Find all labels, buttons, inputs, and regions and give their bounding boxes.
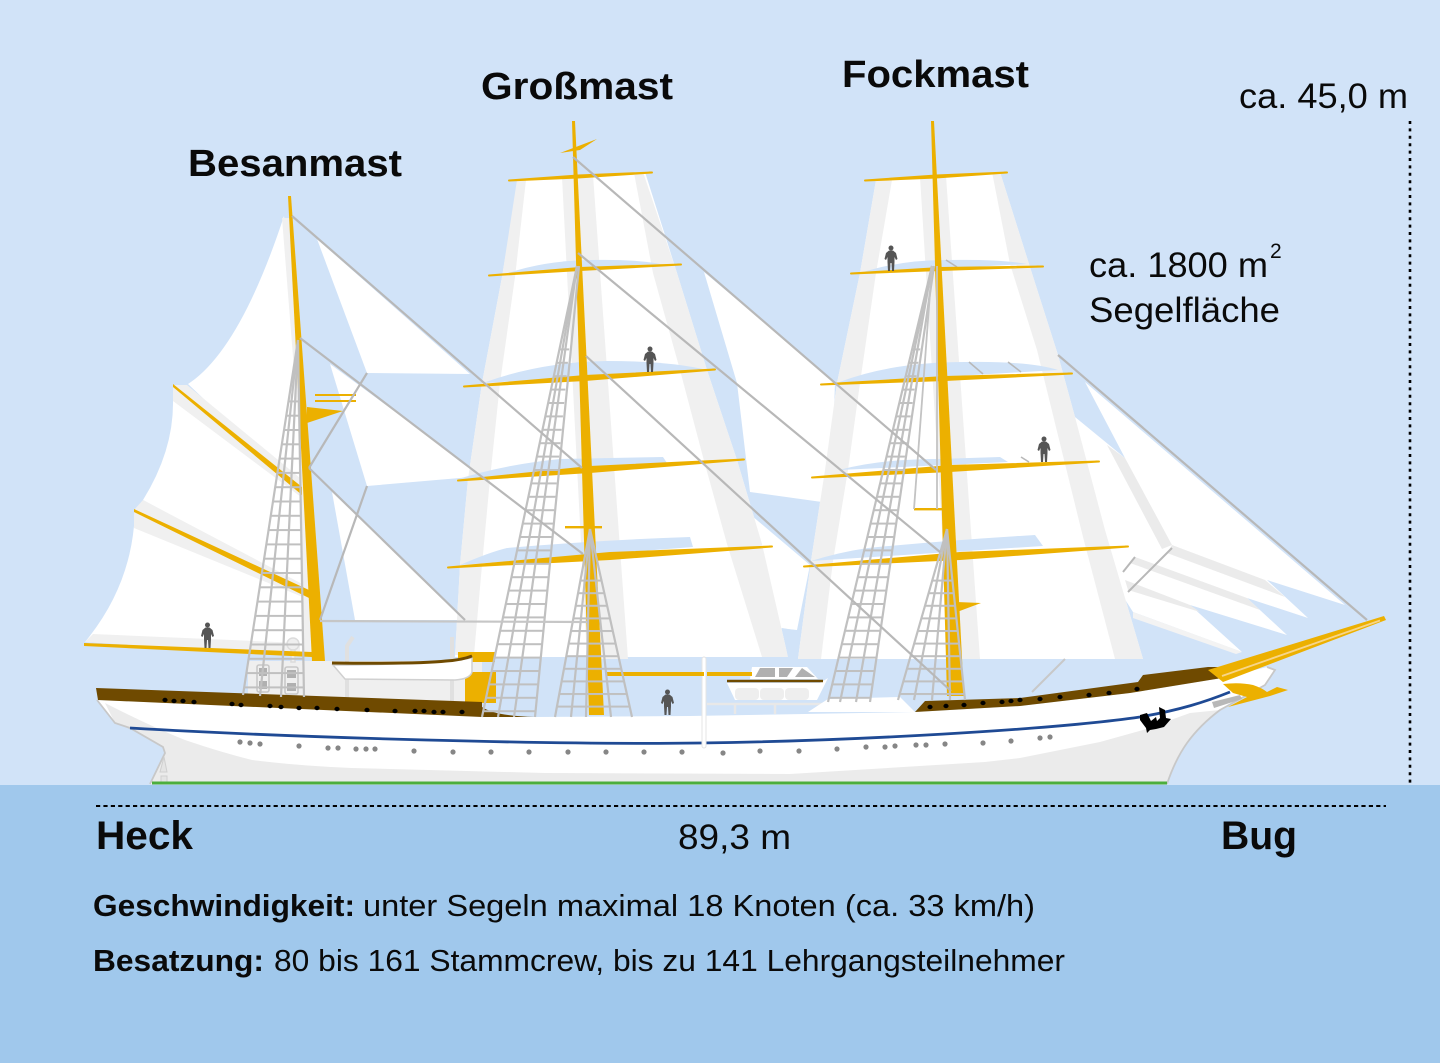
jib sails at the bow <box>1075 382 1345 654</box>
rudder <box>160 757 167 784</box>
height dimension line <box>1409 121 1411 785</box>
crew figures <box>201 246 1050 715</box>
fore mast square sails <box>798 172 1143 659</box>
person on lower fore yard <box>1038 436 1050 462</box>
orange deck blocks <box>458 652 496 703</box>
text: crew: 80 bis 161 Stammcrew, bis zu 141 Lehrgangsteilnehmer <box>274 943 1065 978</box>
sail shading bands <box>798 172 1143 659</box>
sails of the fore mast <box>798 172 1143 659</box>
mast spar <box>572 121 604 715</box>
text: crew: Besatzung: <box>93 943 264 978</box>
sail shading bands <box>85 218 312 656</box>
sky background <box>0 0 1440 786</box>
white hull body <box>97 667 1275 784</box>
person on mizzen boom <box>201 622 214 648</box>
person on upper fore yard <box>884 246 898 271</box>
lower spanker sail <box>85 526 312 656</box>
hull <box>96 657 1275 784</box>
water panel <box>0 785 1440 1063</box>
tender boat with cabin <box>727 667 828 700</box>
fore mast spars <box>804 121 1128 696</box>
mizzen mast shrouds <box>243 340 304 697</box>
heading: Großmast: Großmast <box>481 66 673 108</box>
length dimension line <box>96 805 1386 807</box>
mizzen mast <box>84 196 356 661</box>
hull outlines <box>97 667 1275 784</box>
fore mast forward shrouds <box>828 266 937 702</box>
staysails of the mizzen mast <box>317 239 483 620</box>
label: Heck: Heck <box>96 814 194 858</box>
label: sail area: ca. 1800 m <box>1089 246 1268 285</box>
anchor <box>1140 707 1171 733</box>
lifeboat <box>332 656 472 680</box>
text: speed <box>93 888 1035 923</box>
equipment boxes <box>257 665 298 694</box>
davits <box>347 637 452 702</box>
main to fore stays <box>573 157 936 470</box>
blue hull stripe <box>130 692 1230 743</box>
label: sail area: 2 <box>1270 240 1282 263</box>
radar dome <box>287 638 299 662</box>
staysails between main and fore mast <box>704 272 835 630</box>
label: sail area <box>1089 240 1282 330</box>
main mast square sails <box>455 172 788 657</box>
heading: Fockmast: Fockmast <box>842 54 1029 96</box>
sky showing between fore mast sails <box>811 260 1058 561</box>
mizzen boom line <box>320 621 587 622</box>
person on main yard <box>644 346 656 372</box>
bow ornament <box>1208 616 1386 708</box>
mast cross tree <box>560 139 597 153</box>
heading: Besanmast: Besanmast <box>188 143 402 185</box>
mizzen gaffs <box>309 373 367 468</box>
grey lower hull <box>105 703 1220 783</box>
black bow portholes <box>927 687 1140 709</box>
mizzen to main stays <box>292 216 582 468</box>
mast bracket <box>307 407 343 423</box>
lower stay to deck <box>1032 659 1065 692</box>
white jibs <box>1075 382 1345 652</box>
text: speed: Geschwindigkeit: <box>93 888 355 923</box>
brown bow bulwark <box>915 667 1222 712</box>
yards <box>804 172 1128 566</box>
golden figurehead <box>1223 683 1288 707</box>
label: length: 89,3 m <box>678 818 791 857</box>
stays <box>292 157 1367 692</box>
main mast forward shrouds <box>482 266 579 717</box>
main mast lower shrouds <box>555 529 632 717</box>
sky showing between main mast sails <box>452 260 800 660</box>
label: height: ca. 45,0 m <box>1239 77 1408 116</box>
white flagstaff <box>702 657 706 748</box>
upper gaff sail <box>188 216 305 490</box>
mast spar <box>288 196 325 661</box>
person on deck <box>661 690 674 715</box>
bowsprit highlight <box>1222 620 1380 676</box>
bowsprit <box>1208 616 1386 682</box>
shroud ladders <box>243 266 965 717</box>
stern deckhouse <box>248 661 482 703</box>
sail shading bands <box>455 172 788 659</box>
jib gaffs <box>1123 548 1172 592</box>
fore mast lower shrouds <box>898 529 965 700</box>
black stern portholes <box>162 698 465 714</box>
grey chain fitting <box>1212 695 1242 708</box>
mid deck white superstructure <box>808 697 915 712</box>
jib shading bands <box>1107 445 1285 654</box>
text: speed: unter Segeln maximal 18 Knoten (ca. 33 km/h) <box>363 888 1035 923</box>
fitting on fore mast <box>957 602 981 612</box>
label: sail area: Segelfläche <box>1089 291 1280 330</box>
sky strip and deck background pieces <box>248 637 915 714</box>
main mast spars <box>448 121 772 715</box>
yards <box>448 172 772 568</box>
gaffs and boom <box>173 384 302 495</box>
fore stay to bowsprit <box>1058 355 1367 620</box>
mid deck railing <box>707 704 855 714</box>
middle gaff sail <box>143 400 309 590</box>
sails of the main mast <box>452 172 800 660</box>
small reef lines <box>946 260 1029 462</box>
green waterline <box>152 782 1167 784</box>
sails of the mizzen mast <box>85 216 312 656</box>
mast spar <box>931 121 964 696</box>
brown stern bulwark <box>96 688 535 717</box>
grey hull portholes <box>237 734 1053 756</box>
label: Bug: Bug <box>1221 814 1297 858</box>
boom brace on deck <box>607 672 704 676</box>
